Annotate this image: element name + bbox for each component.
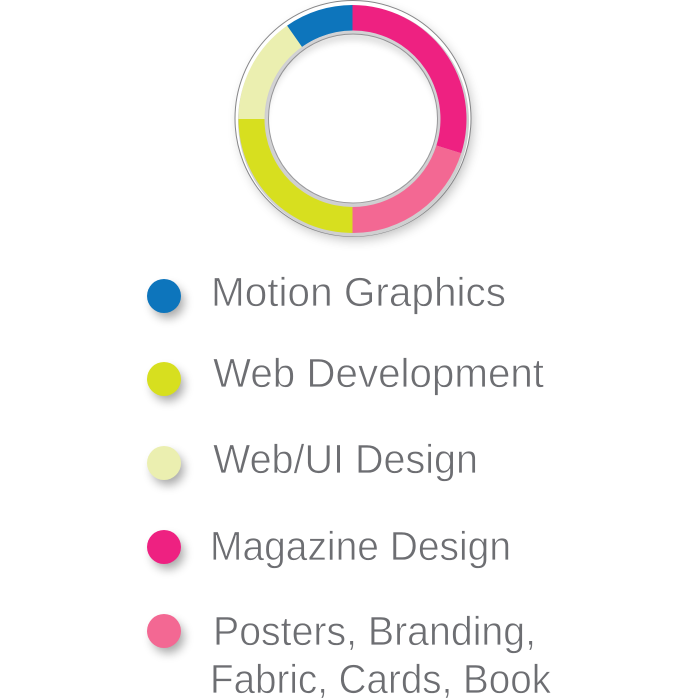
- label: Web/UI Design: [213, 436, 478, 482]
- legend: motion graphics: [147, 269, 506, 318]
- dot: [147, 614, 181, 648]
- ring drop shadow: [240, 7, 472, 239]
- label: Magazine Design: [210, 523, 511, 569]
- ring inner bevel: [266, 30, 440, 204]
- label: Motion Graphics: [211, 269, 506, 315]
- dot shadow: [152, 453, 184, 485]
- donut chart: [235, 0, 472, 239]
- segment: posters, branding, fabric, cards, book: [352, 146, 461, 233]
- ring centre: [268, 34, 438, 203]
- ring lower bevel: [238, 6, 469, 236]
- segment: motion graphics: [287, 5, 352, 47]
- dot shadow: [152, 369, 184, 401]
- dot: [147, 530, 181, 564]
- dot: [147, 362, 181, 396]
- segment: magazine design: [352, 5, 466, 153]
- ring outer bezel: [235, 0, 471, 236]
- segment: web development: [238, 119, 352, 233]
- ring inner shadow: [270, 34, 436, 106]
- dot shadow: [152, 537, 184, 569]
- dot shadow: [152, 286, 184, 318]
- label line 1: Posters, Branding,: [213, 608, 536, 654]
- label: Web Development: [213, 350, 545, 396]
- dot: [147, 279, 181, 313]
- dot shadow: [152, 621, 184, 653]
- legend: magazine design: [147, 523, 511, 569]
- legend: posters, branding, fabric, cards, book: [147, 608, 551, 700]
- legend: web development: [147, 350, 545, 401]
- legend: web/ui design: [147, 436, 478, 485]
- dot: [147, 446, 181, 480]
- segment: web/ui design: [238, 26, 302, 119]
